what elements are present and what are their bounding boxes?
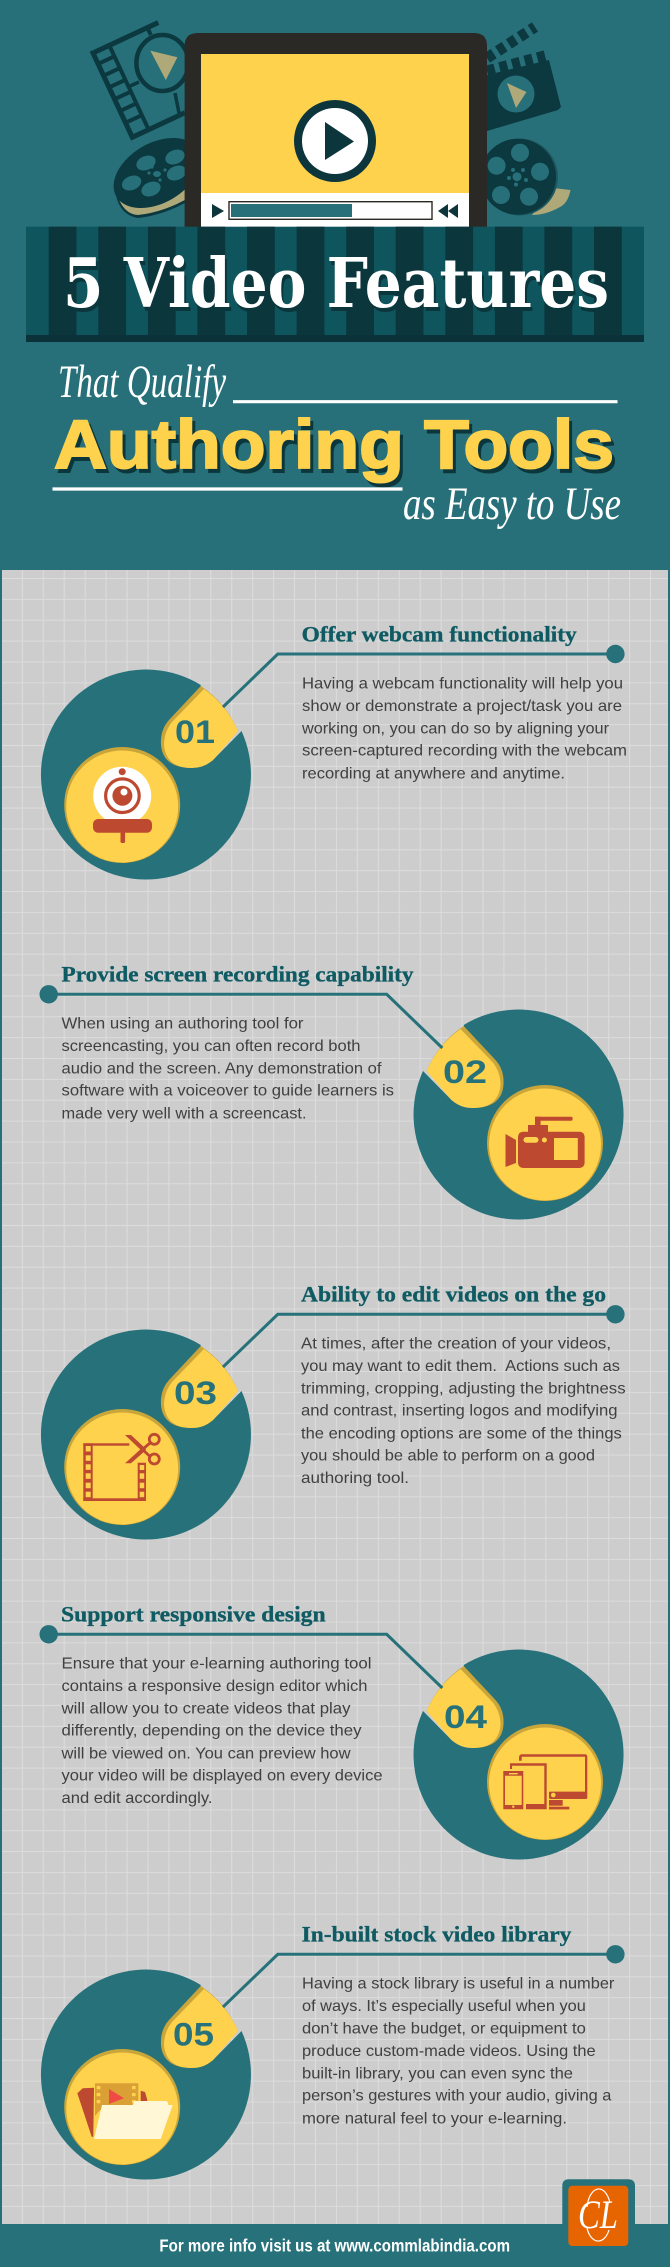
number 02: 02 xyxy=(443,1054,487,1090)
panel: feature 05 stock library xyxy=(41,1922,625,2180)
panel: feature 03 editing xyxy=(41,1282,626,1540)
body text 03: authoring tool. xyxy=(301,1470,409,1487)
body text 05: produce custom-made videos. Using the xyxy=(302,2043,596,2060)
icon: responsive devices xyxy=(487,1724,603,1840)
body text 03: the encoding options are some of the things xyxy=(301,1425,622,1442)
number 03: 03 xyxy=(174,1375,217,1411)
connector line 01 xyxy=(223,645,625,707)
badge circle 04 xyxy=(414,1650,624,1860)
body text 05: of ways. It’s especially useful when you xyxy=(302,1998,586,2015)
body text 02: screencasting, you can often record both xyxy=(62,1038,360,1055)
body text 03 xyxy=(301,1335,626,1487)
body text 04 xyxy=(60,1655,383,1807)
body text 01: recording at anywhere and anytime. xyxy=(302,765,565,782)
body text 02: software with a voiceover to guide learners is xyxy=(62,1083,394,1100)
connector line 03 xyxy=(223,1305,625,1367)
connector line 05 xyxy=(223,1945,625,2007)
badge circle 01 xyxy=(41,670,251,880)
connector line 02 xyxy=(40,985,442,1048)
icon: video camera xyxy=(487,1085,603,1201)
video screen xyxy=(201,54,469,193)
panel: feature 04 responsive xyxy=(40,1602,624,1860)
subtitle: That Qualify: That Qualify xyxy=(58,356,226,408)
body text 05: built-in library, you can even sync the xyxy=(302,2065,573,2082)
body text 02 xyxy=(62,1015,394,1122)
body text 04: will be viewed on. You can preview how xyxy=(60,1745,351,1762)
badge circle 02 xyxy=(414,1010,624,1220)
heading: Authoring Tools: Authoring Tools xyxy=(57,410,617,487)
body text 03: and contrast, inserting logos and modifying xyxy=(301,1403,618,1420)
body text 05: Having a stock library is useful in a number xyxy=(302,1975,615,1992)
body text 02: audio and the screen. Any demonstration of xyxy=(62,1060,382,1077)
body text 01 xyxy=(301,675,627,782)
heading 05: In-built stock video library xyxy=(302,1922,571,1947)
panel: feature 01 webcam xyxy=(41,622,627,880)
body text 05: don’t have the budget, or equipment to xyxy=(302,2020,586,2037)
number 05: 05 xyxy=(173,2017,214,2053)
footer bar xyxy=(0,2224,670,2267)
connector line 04 xyxy=(40,1625,442,1688)
number 01: 01 xyxy=(175,714,215,750)
illustration: film reel right xyxy=(480,138,570,216)
panel: feature 02 screen recording xyxy=(40,962,624,1220)
illustration: film reel left xyxy=(101,124,213,222)
body text 03: At times, after the creation of your videos, xyxy=(301,1335,611,1352)
body text 04: contains a responsive design editor which xyxy=(62,1678,368,1695)
body text 05: person’s gestures with your audio, giving a xyxy=(302,2088,611,2105)
body text 01: show or demonstrate a project/task you are xyxy=(302,698,622,715)
icon: video folder xyxy=(64,2049,180,2165)
body text 04: Ensure that your e-learning authoring tool xyxy=(62,1655,372,1672)
heading 02: Provide screen recording capability xyxy=(62,962,414,987)
icon: film and scissors xyxy=(64,1409,180,1525)
body text 01: working on, you can do so by aligning your xyxy=(301,720,610,737)
icon: webcam xyxy=(64,747,180,863)
body text 05: more natural feel to your e-learning. xyxy=(302,2110,567,2127)
grid background panel xyxy=(2,570,668,2224)
illustration: clapperboard icon xyxy=(487,27,561,131)
body text 02: When using an authoring tool for xyxy=(62,1015,304,1032)
heading: Authoring Tools: Authoring Tools xyxy=(54,406,614,483)
body text 03: trimming, cropping, adjusting the brightness xyxy=(301,1380,626,1397)
illustration: film frame icon xyxy=(93,23,198,137)
illustration: video player monitor xyxy=(185,33,487,227)
body text 03: you should be able to perform on a good xyxy=(301,1448,595,1465)
logo: CL xyxy=(562,2179,635,2246)
footer text: For more info visit us at www.commlabindia.com xyxy=(159,2236,510,2256)
badge circle 03 xyxy=(41,1330,251,1540)
logo: CL: CL xyxy=(578,2192,618,2237)
heading 01: Offer webcam functionality xyxy=(302,622,577,647)
player control bar xyxy=(201,193,469,227)
body text 04: will allow you to create videos that play xyxy=(60,1700,350,1717)
body text 01: screen-captured recording with the webcam xyxy=(302,743,627,760)
play button xyxy=(294,100,376,182)
title band with stripes xyxy=(26,227,644,342)
number 04: 04 xyxy=(444,1699,487,1735)
heading 04: Support responsive design xyxy=(61,1602,326,1627)
body text 03: you may want to edit them. Actions such as xyxy=(301,1358,620,1375)
badge circle 05 xyxy=(41,1970,251,2180)
body text 05 xyxy=(302,1975,615,2127)
body text 04: differently, depending on the device they xyxy=(62,1723,362,1740)
body text 02: made very well with a screencast. xyxy=(62,1105,306,1122)
body text 04: and edit accordingly. xyxy=(62,1790,212,1807)
body text 01: Having a webcam functionality will help you xyxy=(302,675,623,692)
heading 03: Ability to edit videos on the go xyxy=(301,1282,606,1307)
body text 04: your video will be displayed on every device xyxy=(62,1768,383,1785)
